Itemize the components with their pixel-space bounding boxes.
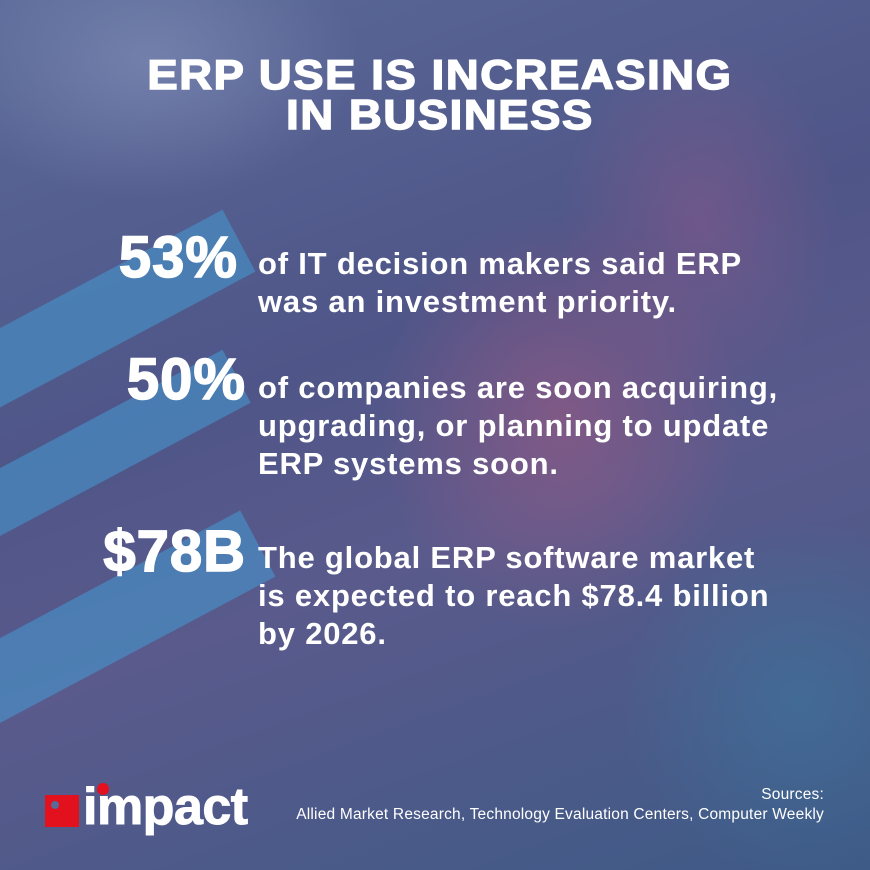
sources (296, 786, 824, 823)
stat 3 text: The global ERP software market (258, 540, 755, 575)
stat 3 number: $78B (103, 519, 246, 584)
stat 3 text (258, 540, 769, 651)
sources: Sources: (761, 786, 824, 803)
title (147, 51, 733, 138)
sources: Allied Market Research, Technology Evaluation Centers, Computer Weekly (296, 806, 824, 823)
stat 1 text (258, 246, 742, 319)
stat 3 text: by 2026. (258, 616, 387, 651)
stat 3 text: is expected to reach $78.4 billion (258, 578, 769, 613)
title: IN BUSINESS (286, 91, 594, 138)
logo: impact: impact (83, 778, 248, 836)
stat 2 number: 50% (127, 347, 246, 412)
stat 1 text: of IT decision makers said ERP (258, 246, 742, 281)
stat 1 text: was an investment priority. (258, 284, 677, 319)
icon: red square (45, 795, 79, 827)
stat 2 text: of companies are soon acquiring, (258, 370, 778, 405)
stat 2 text: upgrading, or planning to update (258, 408, 769, 443)
stat 1 number: 53% (119, 225, 238, 290)
stat 2 text: ERP systems soon. (258, 446, 559, 481)
title: ERP USE IS INCREASING (147, 51, 733, 98)
stat 2 text (258, 370, 778, 481)
